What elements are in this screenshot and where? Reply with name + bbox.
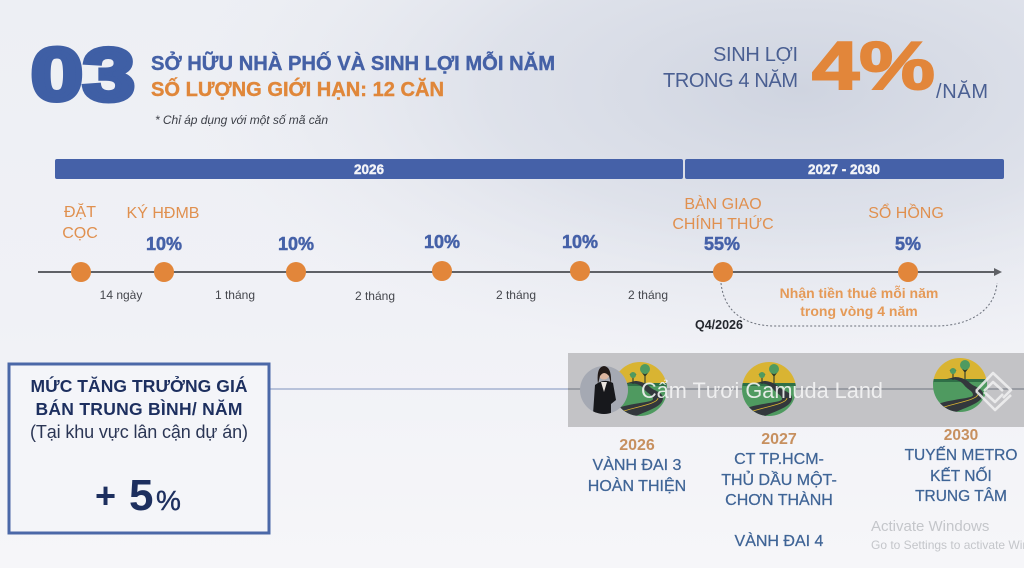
road icon 2030 bbox=[932, 357, 988, 415]
agent avatar bbox=[580, 366, 628, 414]
section number 03: 03 bbox=[31, 33, 135, 116]
milestone 2027: VÀNH ĐAI 4 bbox=[735, 531, 824, 550]
interval labels: 2 tháng bbox=[355, 289, 395, 303]
milestone 2026 bbox=[588, 437, 686, 495]
watermark logo bbox=[976, 373, 1011, 410]
milestone 2030 bbox=[905, 427, 1017, 505]
percentages: 55% bbox=[704, 234, 740, 254]
yield callout bbox=[663, 28, 988, 104]
watermark band bbox=[568, 353, 1024, 427]
milestone labels: SỔ HỒNG bbox=[868, 203, 944, 222]
milestone labels: BÀN GIAO bbox=[684, 194, 762, 213]
period bars: 2027 - 2030 bbox=[808, 162, 880, 177]
percentages: 5% bbox=[895, 234, 921, 254]
milestone 2030: TUYẾN METRO bbox=[905, 447, 1017, 464]
milestone 2027: CT TP.HCM- bbox=[734, 451, 824, 468]
percentages bbox=[146, 232, 921, 254]
timeline axis bbox=[38, 268, 1002, 276]
price growth box: MỨC TĂNG TRƯỞNG GIÁ bbox=[30, 375, 248, 396]
interval labels: 1 tháng bbox=[215, 288, 255, 302]
milestone 2026: 2026 bbox=[619, 437, 655, 454]
rental period bracket bbox=[721, 283, 997, 326]
footnote: * Chỉ áp dụng với một số mã căn bbox=[155, 113, 328, 127]
lower timeline line bbox=[270, 388, 568, 390]
milestone labels: ĐẶT bbox=[64, 202, 96, 221]
yield callout: SINH LỢI bbox=[713, 44, 798, 66]
rental note: Nhận tiền thuê mỗi năm bbox=[780, 285, 938, 301]
milestone 2027: 2027 bbox=[761, 431, 797, 448]
interval labels bbox=[100, 288, 668, 303]
percentages: 10% bbox=[562, 232, 598, 252]
activation notice: Activate Windows bbox=[871, 518, 989, 535]
percentages: 10% bbox=[146, 234, 182, 254]
milestone labels: KÝ HĐMB bbox=[127, 203, 199, 222]
price growth box bbox=[9, 364, 269, 533]
rental note bbox=[780, 285, 938, 319]
milestone 2030: KẾT NỐI bbox=[930, 467, 992, 485]
interval labels: 2 tháng bbox=[628, 288, 668, 302]
percentages: 10% bbox=[278, 234, 314, 254]
road icon 2026 bbox=[612, 361, 668, 419]
milestone 2027 bbox=[721, 431, 837, 550]
yield callout: /NĂM bbox=[936, 80, 988, 103]
milestone labels: CỌC bbox=[62, 225, 98, 242]
price growth box: (Tại khu vực lân cận dự án) bbox=[30, 422, 248, 442]
heading: SỞ HỮU NHÀ PHỐ VÀ SINH LỢI MỖI NĂM bbox=[151, 51, 555, 75]
milestone 2027: THỦ DẦU MỘT- bbox=[721, 470, 837, 489]
timeline milestones bbox=[71, 261, 918, 282]
yield callout: TRONG 4 NĂM bbox=[663, 69, 798, 92]
price growth box: 5 bbox=[129, 471, 153, 520]
price growth box: + bbox=[95, 475, 116, 516]
heading bbox=[151, 51, 555, 101]
milestone 2027: CHƠN THÀNH bbox=[725, 490, 833, 509]
milestone 2030: TRUNG TÂM bbox=[915, 488, 1007, 505]
percentages: 10% bbox=[424, 232, 460, 252]
yield callout: 4% bbox=[812, 28, 935, 104]
handover date: Q4/2026 bbox=[695, 318, 743, 332]
road icon 2027 bbox=[741, 361, 797, 419]
period bars: 2026 bbox=[354, 162, 385, 177]
milestone labels: CHÍNH THỨC bbox=[672, 214, 774, 233]
interval labels: 2 tháng bbox=[496, 288, 536, 302]
milestone 2030: 2030 bbox=[944, 427, 978, 444]
watermark text: Cẩm Tươi Gamuda Land bbox=[641, 378, 883, 403]
activation notice bbox=[871, 518, 1024, 552]
interval labels: 14 ngày bbox=[100, 288, 142, 302]
price growth box: % bbox=[156, 485, 181, 516]
rental note: trong vòng 4 năm bbox=[800, 303, 918, 319]
milestone 2026: HOÀN THIỆN bbox=[588, 476, 686, 495]
heading: SỐ LƯỢNG GIỚI HẠN: 12 CĂN bbox=[151, 77, 444, 101]
milestone 2026: VÀNH ĐAI 3 bbox=[593, 455, 682, 474]
price growth box: BÁN TRUNG BÌNH/ NĂM bbox=[36, 398, 242, 419]
period bars bbox=[55, 159, 1004, 179]
milestone labels bbox=[62, 194, 944, 242]
